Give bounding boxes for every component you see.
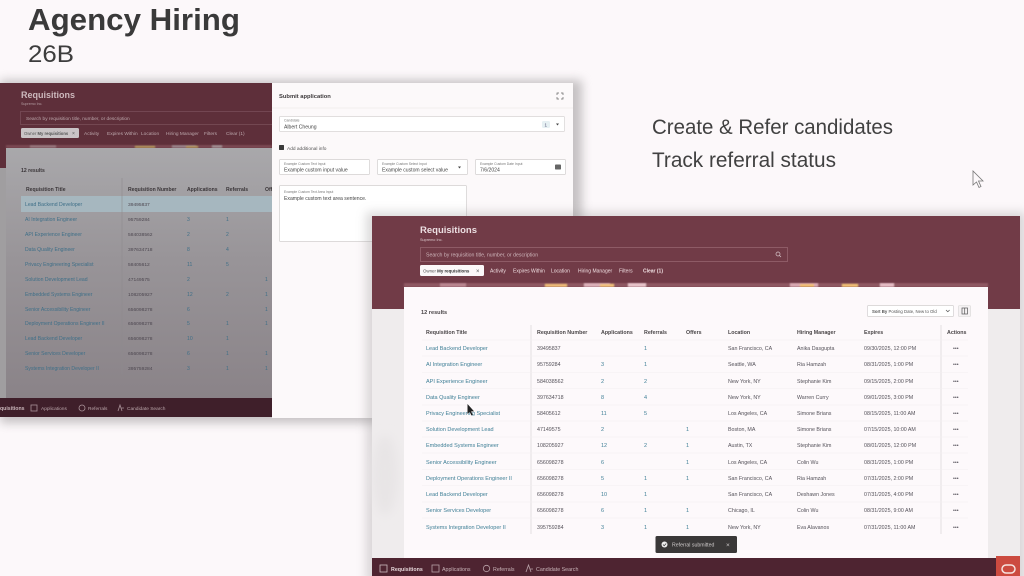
filter chips: Expires Within bbox=[513, 268, 545, 274]
filter chips: Location bbox=[141, 131, 159, 137]
table: dimmed requisitions: 11 bbox=[187, 262, 192, 268]
key points: Create & Refer candidates bbox=[652, 115, 893, 139]
table: dimmed requisitions: 47149575 bbox=[128, 277, 150, 283]
table rows: Colin Wu bbox=[797, 508, 818, 514]
table: dimmed requisitions: Privacy Engineering Specialist bbox=[25, 262, 94, 268]
title: Agency Hiring bbox=[28, 2, 240, 37]
table rows: 58405612 bbox=[537, 411, 561, 417]
icon: expand bbox=[557, 93, 563, 99]
results card bbox=[404, 287, 988, 558]
table rows: Lead Backend Developer bbox=[426, 492, 488, 498]
table: dimmed requisitions: 2 bbox=[226, 232, 229, 238]
table rows: 2 bbox=[644, 379, 647, 385]
table: dimmed requisitions: 656098278 bbox=[128, 307, 153, 313]
table header: Referrals bbox=[644, 330, 667, 336]
table rows: 1 bbox=[686, 443, 689, 449]
table header: Expires bbox=[864, 330, 883, 336]
banner pattern bbox=[6, 145, 272, 148]
table rows: Lead Backend Developer bbox=[426, 346, 488, 352]
table rows: Chicago, IL bbox=[728, 508, 755, 514]
page heading: Requisitions bbox=[420, 225, 477, 236]
table: dimmed requisitions: 2 bbox=[226, 292, 229, 298]
table: dimmed requisitions: 1 bbox=[226, 217, 229, 223]
table rows: Seattle, WA bbox=[728, 362, 756, 368]
page heading: Requisitions bbox=[21, 90, 75, 100]
table: dimmed requisitions: 584038562 bbox=[128, 232, 153, 238]
table: dimmed requisitions: 1 bbox=[265, 277, 268, 283]
table: dimmed requisitions: 1 bbox=[265, 321, 268, 327]
table rows: 584038562 bbox=[537, 379, 564, 385]
table rows: 5 bbox=[644, 411, 647, 417]
table rows: ••• bbox=[953, 508, 959, 514]
table: dimmed requisitions: Embedded Systems Engineer bbox=[25, 292, 93, 298]
table rows: 1 bbox=[686, 508, 689, 514]
table: dimmed requisitions: Lead Backend Developer bbox=[25, 336, 83, 342]
panel: requisitions screenshot bbox=[372, 216, 1020, 576]
table rows: Los Angeles, CA bbox=[728, 411, 768, 417]
table rows: 07/31/2025, 4:00 PM bbox=[864, 492, 913, 498]
table: dimmed requisitions: AI Integration Engineer bbox=[25, 217, 77, 223]
table rows: 2 bbox=[601, 427, 604, 433]
table rows: 3 bbox=[601, 362, 604, 368]
header band bbox=[372, 216, 1020, 309]
table rows: 5 bbox=[601, 476, 604, 482]
table rows: ••• bbox=[953, 427, 959, 433]
custom date input: Example Custom Date Input bbox=[480, 162, 522, 166]
candidate field: Candidate bbox=[284, 118, 300, 122]
table: dimmed requisitions: 1 bbox=[265, 292, 268, 298]
table rows: San Francisco, CA bbox=[728, 346, 773, 352]
table header: Hiring Manager bbox=[797, 330, 836, 336]
table rows: 08/01/2025, 12:00 PM bbox=[864, 443, 916, 449]
table: dimmed requisitions: 5 bbox=[187, 321, 190, 327]
bottom navigation: Applications bbox=[41, 406, 67, 412]
table rows: ••• bbox=[953, 476, 959, 482]
table rows: New York, NY bbox=[728, 395, 761, 401]
table: dimmed requisitions: 397634718 bbox=[128, 247, 153, 253]
filter chips: × bbox=[476, 269, 480, 275]
table: dimmed requisitions: 108205927 bbox=[128, 292, 153, 298]
page heading: Supremo Inc. bbox=[420, 238, 443, 242]
table rows: 1 bbox=[644, 508, 647, 514]
bottom navigation bbox=[372, 558, 1020, 576]
table header bbox=[426, 330, 966, 336]
table rows: 1 bbox=[686, 427, 689, 433]
filter chips: Clear (1) bbox=[643, 268, 663, 274]
table: dimmed requisitions: 1 bbox=[226, 351, 229, 357]
table rows: Simone Brians bbox=[797, 411, 832, 417]
table rows: 07/31/2025, 2:00 PM bbox=[864, 476, 913, 482]
candidate field: Albert Cheung bbox=[284, 124, 317, 130]
table rows: Solution Development Lead bbox=[426, 427, 494, 433]
table rows: San Francisco, CA bbox=[728, 476, 773, 482]
toast: referral submitted: Referral submitted bbox=[672, 542, 714, 548]
results count: 12 results bbox=[21, 168, 45, 174]
table rows: 09/15/2025, 2:00 PM bbox=[864, 379, 913, 385]
table: dimmed requisitions: 39495837 bbox=[128, 202, 150, 208]
table rows: 2 bbox=[644, 443, 647, 449]
table rows: Simone Brians bbox=[797, 427, 832, 433]
search box bbox=[420, 248, 788, 262]
page heading bbox=[21, 90, 75, 106]
table: dimmed requisitions: Senior Services Developer bbox=[25, 351, 86, 357]
table rows: 1 bbox=[644, 525, 647, 531]
custom text area bbox=[280, 186, 466, 242]
filter chips bbox=[420, 265, 663, 276]
table rows: 1 bbox=[686, 476, 689, 482]
table: dimmed requisitions: Applications bbox=[187, 187, 218, 193]
custom select input: Example custom select value bbox=[382, 168, 448, 174]
table: dimmed requisitions: Solution Development Lead bbox=[25, 277, 88, 283]
table: dimmed requisitions: 3 bbox=[187, 217, 190, 223]
table header: Requisition Title bbox=[426, 330, 467, 336]
page heading: Supremo Inc. bbox=[21, 102, 42, 106]
table rows: 656098278 bbox=[537, 492, 564, 498]
filter chips: × bbox=[72, 131, 75, 137]
sort dropdown bbox=[868, 306, 954, 316]
additional info checkbox bbox=[279, 145, 327, 152]
table rows: ••• bbox=[953, 362, 959, 368]
table rows: 10 bbox=[601, 492, 607, 498]
table rows: 2 bbox=[601, 379, 604, 385]
custom select input bbox=[378, 160, 468, 174]
table rows: Senior Services Developer bbox=[426, 508, 491, 514]
filter chips: Activity bbox=[490, 268, 506, 274]
table rows: Los Angeles, CA bbox=[728, 460, 768, 466]
candidate field: 1 bbox=[544, 122, 548, 128]
filter chips bbox=[21, 128, 245, 138]
page heading bbox=[420, 225, 477, 242]
bottom navigation bbox=[0, 398, 272, 417]
candidate field bbox=[280, 116, 564, 132]
table rows: 1 bbox=[644, 362, 647, 368]
table rows: ••• bbox=[953, 525, 959, 531]
table rows: 39495837 bbox=[537, 346, 561, 352]
filter chips: Hiring Manager bbox=[166, 131, 199, 137]
table header: Offers bbox=[686, 330, 702, 336]
table: dimmed requisitions: Senior Accessibility Engineer bbox=[25, 307, 91, 313]
table rows: Ria Hamzah bbox=[797, 362, 826, 368]
header band bbox=[0, 83, 272, 168]
table rows: ••• bbox=[953, 443, 959, 449]
table rows: 397634718 bbox=[537, 395, 564, 401]
table: dimmed requisitions: 656098278 bbox=[128, 351, 153, 357]
table rows: Ria Hamzah bbox=[797, 476, 826, 482]
table rows: 1 bbox=[686, 525, 689, 531]
table: dimmed requisitions: Deployment Operations Engineer II bbox=[25, 321, 105, 327]
table header: Location bbox=[728, 330, 750, 336]
logo: oracle bbox=[996, 556, 1020, 576]
table rows: Data Quality Engineer bbox=[426, 395, 480, 401]
table rows: 08/15/2025, 11:00 AM bbox=[864, 411, 915, 417]
table rows: 656098278 bbox=[537, 476, 564, 482]
toast: referral submitted: × bbox=[726, 542, 730, 549]
shadow: left screenshot bbox=[0, 80, 582, 423]
icon: outline cursor bbox=[973, 171, 983, 188]
key points bbox=[652, 115, 893, 172]
table: dimmed requisitions: Requisition Title bbox=[26, 187, 66, 193]
table: dimmed requisitions: 3 bbox=[187, 366, 190, 372]
table rows: 1 bbox=[644, 476, 647, 482]
filter chips: Owner My requisitions bbox=[423, 268, 470, 274]
table rows: 08/31/2025, 1:00 PM bbox=[864, 362, 913, 368]
custom text input: Example Custom Text Input bbox=[284, 162, 325, 166]
table rows: ••• bbox=[953, 395, 959, 401]
filter chips: Filters bbox=[204, 131, 218, 137]
table rows: New York, NY bbox=[728, 379, 761, 385]
bottom navigation: Candidate Search bbox=[127, 406, 166, 412]
table rows: 47149575 bbox=[537, 427, 561, 433]
table rows: ••• bbox=[953, 346, 959, 352]
table: dimmed requisitions: 8 bbox=[187, 247, 190, 253]
table rows: 1 bbox=[686, 460, 689, 466]
panel: dimmed requisitions screenshot bbox=[0, 83, 273, 417]
bottom navigation: Applications bbox=[442, 567, 471, 573]
table: dimmed requisitions: Lead Backend Developer bbox=[25, 202, 83, 208]
table: dimmed requisitions: 2 bbox=[187, 277, 190, 283]
table rows: 656098278 bbox=[537, 460, 564, 466]
table rows: Colin Wu bbox=[797, 460, 818, 466]
filter chips: Expires Within bbox=[107, 131, 138, 137]
filter chips: Hiring Manager bbox=[578, 268, 613, 274]
table rows: 08/31/2025, 9:00 AM bbox=[864, 508, 913, 514]
bottom navigation: quisitions bbox=[0, 406, 25, 412]
table: dimmed requisitions: 95759284 bbox=[128, 217, 150, 223]
table rows: Deshawn Jones bbox=[797, 492, 835, 498]
custom text area: Example Custom Text Area Input bbox=[284, 190, 333, 194]
table: dimmed requisitions: 395759284 bbox=[128, 366, 153, 372]
bottom navigation: Referrals bbox=[493, 567, 515, 573]
bottom navigation: Requisitions bbox=[391, 567, 423, 573]
table rows: Deployment Operations Engineer II bbox=[426, 476, 512, 482]
table rows: 8 bbox=[601, 395, 604, 401]
table rows: Senior Accessibility Engineer bbox=[426, 460, 497, 466]
table: dimmed requisitions: 6 bbox=[187, 307, 190, 313]
table: dimmed requisitions: 1 bbox=[226, 321, 229, 327]
table rows: 3 bbox=[601, 525, 604, 531]
table rows: API Experience Engineer bbox=[426, 379, 488, 385]
table rows: 09/01/2025, 3:00 PM bbox=[864, 395, 913, 401]
soft background smudge bbox=[372, 435, 398, 515]
key points: Track referral status bbox=[652, 148, 836, 172]
table rows: Austin, TX bbox=[728, 443, 753, 449]
search box: Search by requisition title, number, or description bbox=[426, 252, 538, 258]
results count: 12 results bbox=[421, 310, 447, 316]
table rows: 1 bbox=[644, 346, 647, 352]
table: dimmed requisitions: 1 bbox=[265, 351, 268, 357]
table: dimmed requisitions: Requisition Number bbox=[128, 187, 176, 193]
sort dropdown: Sort By Posting Date, New to Old bbox=[872, 309, 937, 314]
table rows: 4 bbox=[644, 395, 647, 401]
table rows: ••• bbox=[953, 411, 959, 417]
table rows: 6 bbox=[601, 508, 604, 514]
table: requisitions bbox=[422, 325, 968, 534]
table rows: 11 bbox=[601, 411, 607, 417]
custom text input bbox=[280, 160, 370, 174]
table rows: 08/31/2025, 1:00 PM bbox=[864, 460, 913, 466]
filter chips: Clear (1) bbox=[226, 131, 245, 137]
table: dimmed requisitions: 2 bbox=[187, 232, 190, 238]
table rows: 07/15/2025, 10:00 AM bbox=[864, 427, 916, 433]
table: dimmed requisitions: 1 bbox=[226, 366, 229, 372]
table: dimmed requisitions: 1 bbox=[226, 336, 229, 342]
table rows: 108205927 bbox=[537, 443, 564, 449]
column toggle button bbox=[958, 306, 970, 316]
additional info checkbox: Add additional info bbox=[287, 146, 327, 152]
table rows: AI Integration Engineer bbox=[426, 362, 482, 368]
table: dimmed requisitions: Off bbox=[265, 187, 273, 193]
bottom navigation: Candidate Search bbox=[536, 567, 578, 573]
table: dimmed requisitions: Data Quality Engineer bbox=[25, 247, 75, 253]
table rows: Stephanie Kim bbox=[797, 443, 832, 449]
table: dimmed requisitions: Systems Integration Developer II bbox=[25, 366, 99, 372]
table: dimmed requisitions: 656098278 bbox=[128, 336, 153, 342]
table rows: Warren Curry bbox=[797, 395, 829, 401]
results card bbox=[6, 148, 272, 398]
table rows: San Francisco, CA bbox=[728, 492, 773, 498]
custom select input: Example Custom Select Input bbox=[382, 162, 427, 166]
table rows: 09/30/2025, 12:00 PM bbox=[864, 346, 916, 352]
filter chips: Location bbox=[551, 268, 570, 274]
custom text area: Example custom text area sentence. bbox=[284, 196, 366, 202]
table header: Applications bbox=[601, 330, 633, 336]
drawer heading: Submit application bbox=[279, 94, 331, 100]
table: dimmed requisitions: 58405612 bbox=[128, 262, 150, 268]
title bbox=[28, 2, 240, 68]
table rows: 1 bbox=[644, 492, 647, 498]
table rows: ••• bbox=[953, 379, 959, 385]
title: 26B bbox=[28, 41, 74, 68]
table: dimmed requisitions: API Experience Engineer bbox=[25, 232, 82, 238]
table rows: Boston, MA bbox=[728, 427, 756, 433]
search box: Search by requisition title, number, or description bbox=[26, 116, 130, 122]
table rows: Systems Integration Developer II bbox=[426, 525, 506, 531]
table rows: 95759284 bbox=[537, 362, 561, 368]
table rows: 6 bbox=[601, 460, 604, 466]
table rows bbox=[426, 346, 959, 531]
custom text input: Example custom input value bbox=[284, 168, 348, 174]
custom date input: 7/6/2024 bbox=[480, 168, 500, 174]
table rows: Privacy Engineering Specialist bbox=[426, 411, 500, 417]
table: dimmed requisitions: 656098278 bbox=[128, 321, 153, 327]
filter chips: Filters bbox=[619, 268, 633, 274]
table rows: ••• bbox=[953, 460, 959, 466]
table: dimmed requisitions: 6 bbox=[187, 351, 190, 357]
table rows: ••• bbox=[953, 492, 959, 498]
search box bbox=[20, 112, 272, 124]
table rows: Embedded Systems Engineer bbox=[426, 443, 499, 449]
table: dimmed requisitions bbox=[21, 178, 273, 374]
filter chips: Owner My requisitions bbox=[24, 131, 69, 136]
shadow: right screenshot bbox=[366, 212, 1024, 576]
table rows: Anika Dasgupta bbox=[797, 346, 834, 352]
bottom navigation: Referrals bbox=[88, 406, 108, 412]
table: dimmed requisitions: 1 bbox=[265, 307, 268, 313]
table rows: 07/31/2025, 11:00 AM bbox=[864, 525, 915, 531]
custom date input bbox=[476, 160, 566, 174]
table header: Requisition Number bbox=[537, 330, 587, 336]
table rows: 395759284 bbox=[537, 525, 564, 531]
table rows: Stephanie Kim bbox=[797, 379, 832, 385]
table: dimmed requisitions: 1 bbox=[265, 366, 268, 372]
table rows: 12 bbox=[601, 443, 607, 449]
table: dimmed requisitions: 4 bbox=[226, 247, 229, 253]
table: dimmed requisitions: 10 bbox=[187, 336, 193, 342]
table rows: New York, NY bbox=[728, 525, 761, 531]
panel: submit application drawer bbox=[272, 83, 573, 418]
table rows: 656098278 bbox=[537, 508, 564, 514]
table rows: Eva Alavanos bbox=[797, 525, 829, 531]
toast: referral submitted bbox=[656, 536, 737, 553]
table: dimmed requisitions: 5 bbox=[226, 262, 229, 268]
table header: Actions bbox=[947, 330, 966, 336]
icon: table cursor bbox=[468, 404, 474, 416]
table: dimmed requisitions: 12 bbox=[187, 292, 193, 298]
table: dimmed requisitions: Referrals bbox=[226, 187, 248, 193]
banner pattern bbox=[404, 283, 988, 287]
filter chips: Activity bbox=[84, 131, 100, 137]
